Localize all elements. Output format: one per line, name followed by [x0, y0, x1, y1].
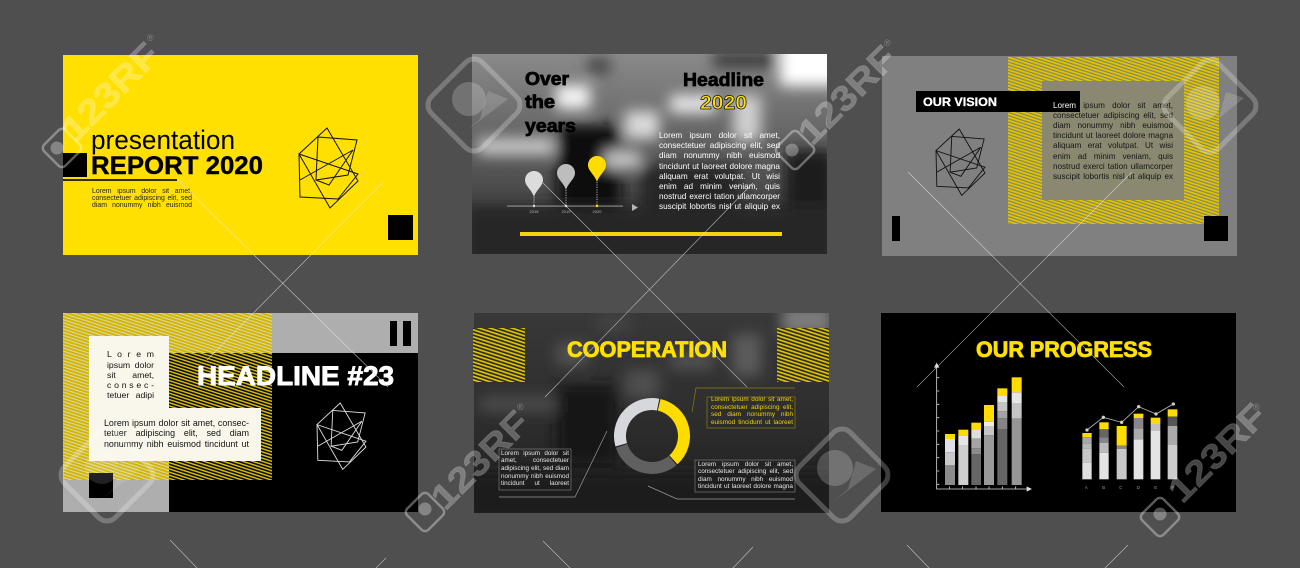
callout: bottom right: consectetuer adipiscing elit, sed [698, 468, 793, 475]
callout: bottom right: diam nonummy nibh euismod [698, 476, 793, 483]
black accent square [63, 153, 87, 177]
watermark: registered marks: ® [884, 38, 891, 48]
body text: consectetuer adipiscing elit, sed [659, 141, 780, 150]
callout: top right [692, 388, 795, 428]
callout: top right: Lorem ipsum dolor sit amet, [711, 396, 793, 403]
callout: left: tincidunt ut laoreet [501, 480, 569, 487]
body text: consectetuer adipiscing elit, sed [92, 194, 192, 202]
grey inner text panel [1042, 81, 1184, 200]
icon: geometric polygons [317, 403, 366, 469]
light hatched block [63, 313, 272, 480]
chart: stacked bars with line: B [1102, 485, 1105, 490]
body text: enim ad minim veniam, quis [1053, 152, 1173, 161]
diagonal white lines [170, 172, 1132, 568]
callout: bottom right: tincidunt ut laoreet dolore magna [698, 483, 793, 490]
watermark: 123RF marks [53, 35, 1274, 517]
underline rule [63, 179, 177, 181]
panel: headline 23 slide [63, 313, 418, 512]
heading: headline: Headline [683, 70, 764, 90]
watermark: 123RF marks: 123RF [790, 38, 904, 152]
paragraph text: tetuer adipiscing elit, sed diam [104, 428, 249, 438]
callout: left: Lorem ipsum dolor sit [501, 450, 569, 456]
black corner square [1204, 216, 1228, 241]
timeline with pins [507, 156, 638, 214]
callout: bottom right [648, 460, 795, 499]
chart: stacked bars with line: F [1171, 485, 1174, 490]
heading: our vision: OUR VISION [923, 95, 997, 109]
small text: L o r e m [107, 349, 154, 359]
watermark: registered marks: ® [517, 402, 524, 412]
title: presentation: presentation [91, 125, 235, 155]
body text: diam nonummy nibh euismod [659, 151, 780, 160]
heading: cooperation: COOPERATION [567, 337, 727, 362]
chart: stacked bars with line: C [1119, 485, 1122, 490]
body text: enim ad minim veniam, quis [659, 182, 780, 191]
watermark: registered marks [147, 33, 1260, 412]
icon: geometric polygons [936, 129, 985, 195]
black heading bar [916, 91, 1080, 112]
grey top-right block [272, 313, 418, 353]
heading: 2020: 2020 [700, 93, 747, 114]
paragraph text: nonummy nibh euismod tincidunt ut [104, 439, 249, 449]
black vertical bar [892, 216, 900, 241]
body text: aliquam erat volutpat. Ut wisi [1053, 141, 1173, 150]
body text [1053, 101, 1173, 185]
callout: left: amet, consectetuer [501, 457, 569, 464]
blurred photo background [472, 54, 827, 254]
watermark: registered marks: ® [147, 33, 154, 43]
callout: left [499, 431, 607, 497]
watermark: 123RF marks: 123RF [53, 35, 167, 149]
donut chart [620, 404, 684, 468]
timeline with pins: 2020 [593, 209, 602, 214]
black square [89, 473, 113, 498]
watermark: 123RF marks: 123RF [423, 403, 537, 517]
timeline with pins: 2018 [530, 209, 539, 214]
callout: top right: consectetuer adipiscing elit, [711, 404, 793, 411]
body text: tincidunt ut laoreet dolore magna [1053, 131, 1173, 140]
callout: top right: sed diam nonummy nibh [711, 411, 793, 418]
chart: stacked bars with line: D [1137, 485, 1140, 490]
callout: left: adipiscing elit, sed diam [501, 465, 569, 472]
panel: our vision slide [882, 56, 1237, 256]
heading: over the years [525, 69, 576, 136]
heading: over the years: the [525, 92, 555, 112]
callout: bottom right: Lorem ipsum dolor sit amet, [698, 460, 793, 468]
body text: tincidunt ut laoreet dolore magna [659, 162, 780, 171]
callout: left: nonummy nibh euismod [501, 473, 569, 480]
body text: Lorem ipsum dolor sit amet, [92, 188, 192, 194]
heading: over the years: Over [525, 69, 569, 89]
heading: our progress: OUR PROGRESS [976, 337, 1152, 362]
body text: suscipit lobortis nisl ut aliquip ex [1053, 172, 1173, 181]
paragraph text [104, 418, 249, 451]
watermark: 123RF marks: 123RF [1160, 396, 1274, 510]
icon: geometric polygons [299, 128, 358, 208]
timeline with pins: 2019 [562, 209, 571, 214]
heading: headline #23: HEADLINE #23 [197, 361, 394, 391]
chart: stacked bars with line [1082, 402, 1177, 490]
body text: aliquam erat volutpat. Ut wisi [659, 172, 780, 181]
body text: Lorem ipsum dolor sit amet, [1053, 101, 1173, 110]
small text: tetuer adipi [107, 390, 154, 400]
grey bottom-left block [63, 480, 169, 512]
white text boxes [89, 336, 261, 461]
panel: cooperation slide [473, 313, 829, 513]
small text: sit amet, [107, 370, 154, 380]
body text [92, 188, 192, 210]
watermark: large camera marks [56, 54, 1261, 526]
chart: stacked bars with axes [934, 363, 1032, 492]
body text: diam nonummy nibh euismod [1053, 121, 1173, 130]
yellow bar [520, 232, 782, 236]
hatched square right [777, 328, 829, 382]
pause-like bars [390, 321, 411, 346]
body text: nostrud exerci tation ullamcorper [659, 192, 780, 201]
panel: our progress slide [881, 313, 1236, 512]
small text [107, 349, 154, 401]
watermark: registered marks: ® [1253, 402, 1260, 412]
blurred photo background [474, 313, 829, 513]
black corner square [388, 215, 413, 240]
body text: diam nonummy nibh euismod [92, 202, 192, 208]
callout: top right: euismod tincidunt ut laoreet [711, 419, 793, 426]
body text: consectetuer adipiscing elit, sed [1053, 111, 1173, 120]
hatched yellow block [1008, 57, 1219, 224]
chart: stacked bars with line: A [1085, 485, 1088, 490]
body text: nostrud exerci tation ullamcorper [1053, 162, 1173, 171]
title: report 2020: REPORT 2020 [91, 152, 263, 180]
body text: suscipit lobortis nisl ut aliquip ex [659, 202, 780, 211]
small text: c o n s e c - [107, 380, 154, 390]
heading: over the years: years [525, 116, 576, 136]
small text: ipsum dolor [107, 360, 154, 370]
chart: stacked bars with line: E [1154, 485, 1157, 490]
dark hatched block [169, 353, 272, 480]
body text [659, 131, 780, 215]
paragraph text: Lorem ipsum dolor sit amet, consec- [104, 418, 249, 428]
body text: Lorem ipsum dolor sit amet, [659, 131, 780, 140]
panel: over the years slide [472, 54, 827, 254]
hatched square left [473, 328, 525, 382]
watermark: small camera marks [41, 127, 1181, 538]
panel: presentation report slide [63, 55, 418, 255]
